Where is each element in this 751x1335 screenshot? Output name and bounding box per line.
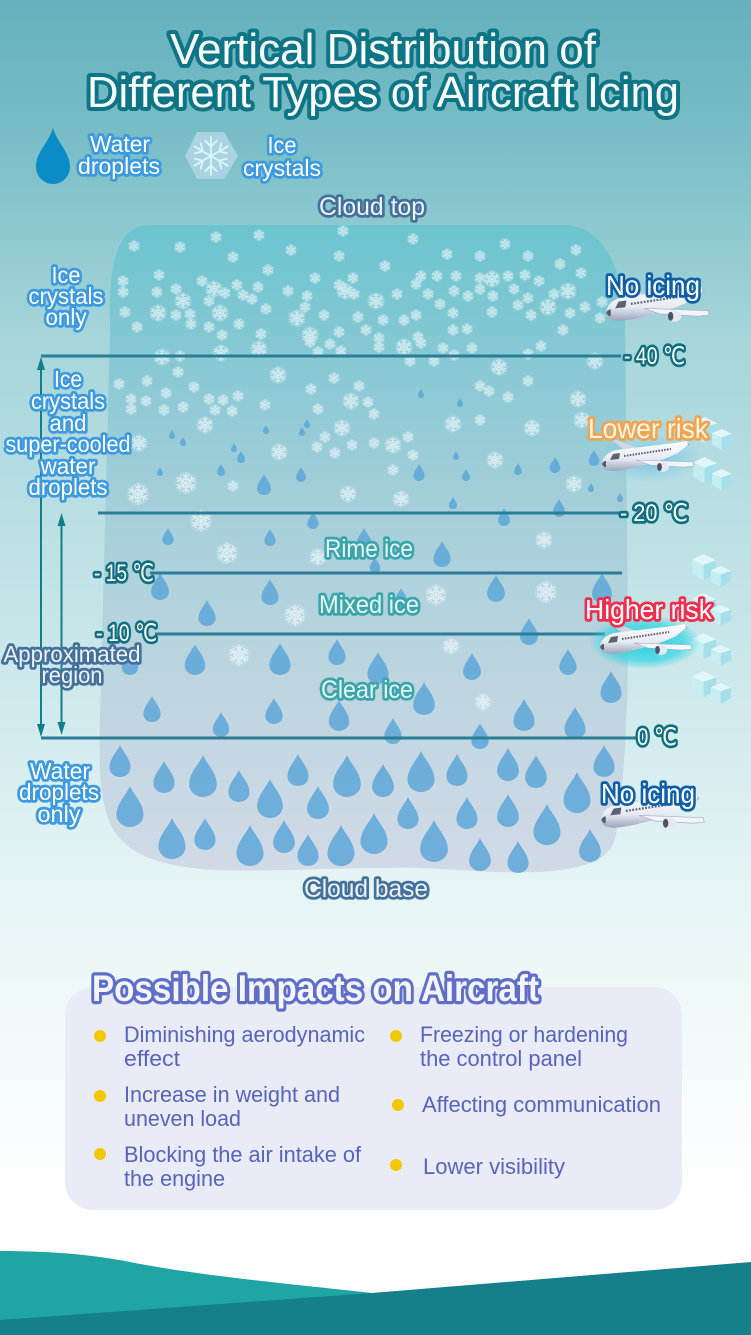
temperature labels: - 40 ℃ bbox=[624, 343, 685, 370]
plane: no icing bottom: No icing bbox=[601, 778, 695, 809]
bullet dots bbox=[94, 1030, 404, 1171]
impact list: the engine bbox=[124, 1166, 225, 1191]
impact list: Diminishing aerodynamic bbox=[124, 1022, 365, 1047]
temperature lines bbox=[41, 356, 640, 738]
heading: Possible Impacts on Aircraft bbox=[92, 968, 539, 1009]
plane: lower risk bbox=[588, 413, 709, 482]
legend: ice crystals: Ice bbox=[268, 132, 296, 158]
impact list: Increase in weight and bbox=[124, 1082, 340, 1107]
legend: water droplets: droplets bbox=[78, 153, 160, 179]
impact list: uneven load bbox=[124, 1106, 241, 1131]
impact list: effect bbox=[124, 1046, 180, 1071]
title: Different Types of Aircraft Icing bbox=[87, 68, 679, 117]
plane: no icing bottom bbox=[601, 778, 704, 829]
label: ice crystals and super-cooled water droplets: crystals bbox=[31, 388, 105, 414]
label: ice crystals only bbox=[28, 262, 104, 330]
bottom wave: light teal bbox=[0, 1251, 372, 1335]
temperature labels: 0 ℃ bbox=[637, 724, 677, 751]
label: water droplets only: only bbox=[38, 801, 81, 827]
label: approximated region: region bbox=[42, 662, 102, 688]
impact list: Affecting communication bbox=[422, 1092, 661, 1117]
label: ice crystals and super-cooled water droplets: droplets bbox=[28, 474, 108, 500]
legend: ice crystals bbox=[185, 132, 321, 181]
plane: lower risk: Lower risk bbox=[588, 413, 709, 444]
label: ice crystals only: crystals bbox=[28, 283, 104, 309]
ice type labels: Clear ice bbox=[321, 676, 413, 704]
label: approximated region: Approximated bbox=[4, 641, 140, 667]
plane: no icing top bbox=[606, 270, 709, 322]
label: ice crystals and super-cooled water droplets: super-cooled bbox=[6, 431, 130, 457]
impact list bbox=[124, 1022, 661, 1191]
label: water droplets only bbox=[19, 758, 99, 827]
label: ice crystals and super-cooled water droplets bbox=[6, 366, 130, 500]
legend: ice crystals: crystals bbox=[243, 155, 321, 181]
temperature labels: - 10 ℃ bbox=[96, 620, 157, 647]
panel: possible impacts bbox=[65, 968, 682, 1210]
label: approximated region bbox=[4, 641, 140, 688]
label: ice crystals and super-cooled water droplets: and bbox=[50, 410, 86, 436]
legend: water droplets bbox=[36, 128, 160, 184]
impact list: Blocking the air intake of bbox=[124, 1142, 362, 1167]
ice cubes: lower risk bbox=[693, 417, 732, 490]
label: water droplets only: droplets bbox=[19, 779, 99, 805]
impact list: Freezing or hardening bbox=[420, 1022, 628, 1047]
temperature labels: - 20 ℃ bbox=[620, 500, 688, 527]
plane: higher risk bbox=[585, 594, 713, 669]
ice type labels: Mixed ice bbox=[319, 591, 419, 619]
temperature labels: - 15 ℃ bbox=[94, 560, 154, 587]
cloud top label: Cloud top bbox=[319, 193, 425, 221]
cloud base label: Cloud base bbox=[304, 875, 428, 903]
bottom wave: dark teal bbox=[0, 1262, 751, 1335]
arrow: ice crystals and super-cooled range bbox=[37, 357, 45, 737]
water droplets in the cloud bbox=[109, 389, 623, 873]
title bbox=[87, 25, 679, 117]
impact list: Lower visibility bbox=[423, 1154, 565, 1179]
ice type labels bbox=[319, 535, 419, 704]
label: ice crystals only: only bbox=[46, 304, 87, 330]
plane: higher risk: Higher risk bbox=[585, 594, 713, 625]
ice type labels: Rime ice bbox=[325, 535, 413, 563]
ice cubes: higher risk bbox=[692, 554, 731, 704]
title: Vertical Distribution of bbox=[170, 25, 597, 74]
impact list: the control panel bbox=[420, 1046, 582, 1071]
plane: no icing top: No icing bbox=[606, 270, 700, 301]
label: ice crystals and super-cooled water droplets: Ice bbox=[54, 366, 82, 392]
label: water droplets only: Water bbox=[30, 758, 90, 784]
label: ice crystals only: Ice bbox=[52, 262, 80, 288]
label: ice crystals and super-cooled water droplets: water bbox=[40, 453, 96, 479]
arrow: approximated region range bbox=[58, 513, 66, 735]
temperature labels bbox=[94, 343, 688, 751]
snowflakes: ice crystals in the upper cloud bbox=[113, 225, 608, 711]
legend: water droplets: Water bbox=[90, 131, 150, 157]
cloud body bbox=[100, 225, 628, 872]
